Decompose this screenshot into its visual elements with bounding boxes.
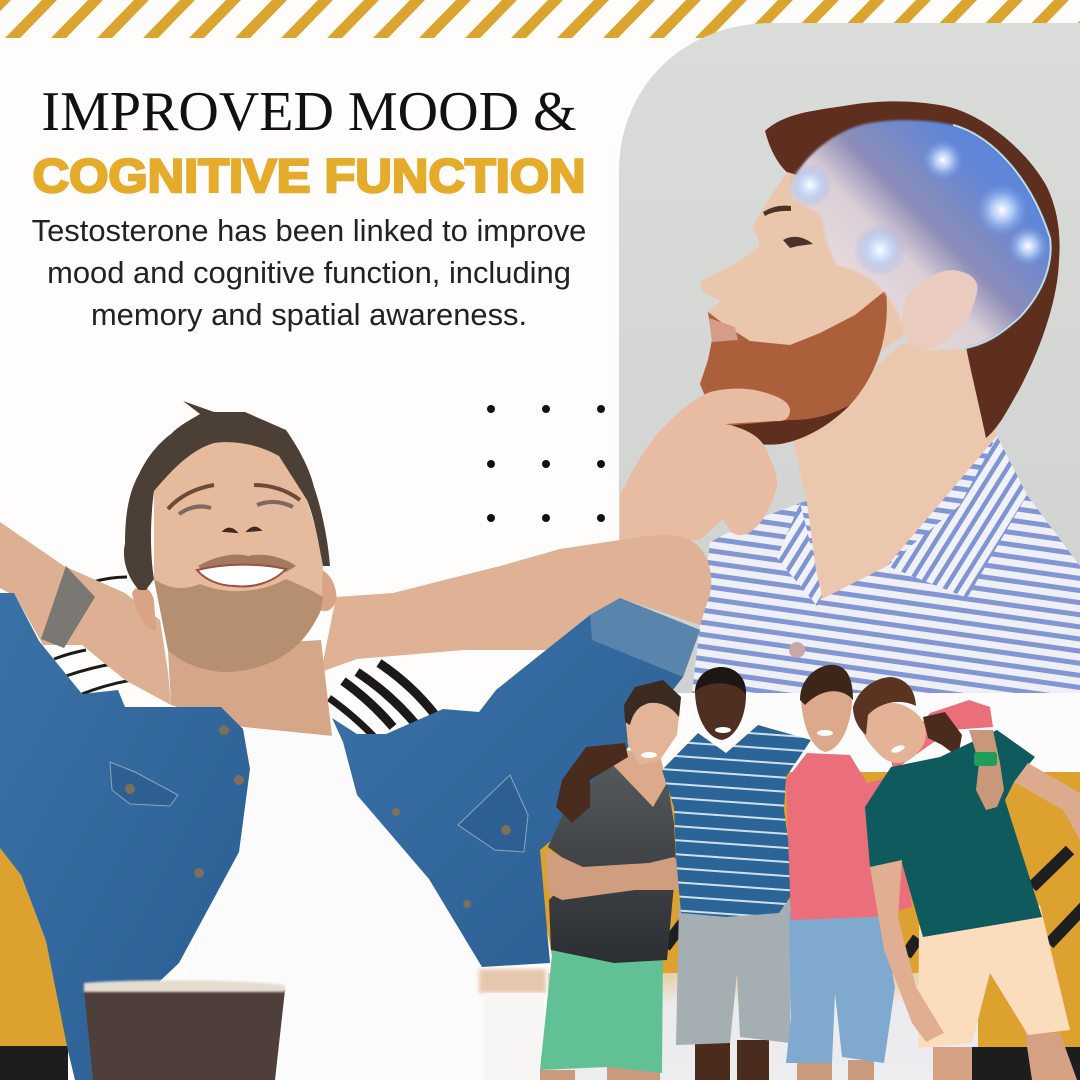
denim shirt left <box>0 593 250 1080</box>
concentric black arcs <box>54 577 436 742</box>
beard shadow <box>725 405 850 445</box>
body text <box>32 213 586 332</box>
group of four friends <box>540 665 1080 1080</box>
pale tabletop <box>484 993 544 1080</box>
arm over shoulder <box>969 730 1004 810</box>
eyes <box>179 502 293 514</box>
wristwatch <box>41 566 95 648</box>
smile <box>197 565 286 586</box>
face <box>154 441 323 672</box>
hair <box>124 401 330 590</box>
body text: mood and cognitive function, including <box>47 255 571 290</box>
friend 4: teal tee <box>853 677 1080 1080</box>
left chest pocket <box>110 762 178 806</box>
glowing spark 3 <box>1008 226 1048 266</box>
cup rim <box>84 980 285 992</box>
far arm <box>1014 763 1080 840</box>
friend 2: blue stripe polo <box>556 667 811 1080</box>
dark hand on shoulder <box>923 712 962 757</box>
neck <box>793 340 997 600</box>
raised arm <box>321 535 711 672</box>
panel: thinking man photo <box>619 23 1080 693</box>
hair <box>800 665 853 705</box>
smile <box>817 730 833 736</box>
beard <box>700 290 887 445</box>
body text: memory and spatial awareness. <box>91 297 527 332</box>
gold block left <box>0 848 68 1046</box>
near arm <box>870 860 944 1042</box>
shirt button <box>789 642 805 658</box>
title line 2: COGNITIVE FUNCTION <box>33 149 586 202</box>
neck <box>168 640 332 736</box>
coffee cup <box>84 980 285 1080</box>
smile <box>890 744 906 754</box>
stubble <box>154 579 323 672</box>
left collar <box>777 503 822 606</box>
face <box>700 172 920 444</box>
ear <box>902 270 978 349</box>
tee <box>548 763 676 963</box>
friend 3: pink henley <box>786 665 993 1080</box>
sleeve cuff highlight <box>590 598 700 677</box>
glowing rim <box>953 125 1051 349</box>
eyebrow strokes <box>168 485 300 509</box>
glowing spark 4 <box>854 224 906 276</box>
forearm and hand behind head <box>0 522 171 705</box>
glowing spark 1 <box>923 140 963 180</box>
legs <box>695 1040 769 1080</box>
denim shirt right <box>332 598 700 967</box>
table edge blur <box>479 969 546 993</box>
pink shirt <box>786 700 993 920</box>
legs <box>933 1033 1077 1080</box>
green watch <box>974 752 997 766</box>
arm around friend <box>556 743 628 823</box>
green shorts <box>540 945 663 1073</box>
smile <box>715 727 731 733</box>
hair <box>624 680 681 725</box>
peach shorts <box>918 905 1070 1048</box>
nostrils <box>224 528 260 532</box>
hair <box>853 677 916 735</box>
glowing spark 2 <box>976 184 1028 236</box>
right chest pocket <box>458 775 528 852</box>
arm <box>546 850 691 900</box>
legs <box>540 1067 660 1080</box>
right collar <box>887 436 1027 598</box>
hair <box>765 101 1060 438</box>
top striped band <box>0 0 1080 38</box>
blue shorts <box>786 908 895 1063</box>
striped polo <box>662 725 811 917</box>
white t-shirt <box>170 727 486 1080</box>
grey shorts <box>676 900 792 1045</box>
body text: Testosterone has been linked to improve <box>32 213 586 248</box>
striped shirt <box>692 436 1080 693</box>
white gap under panel <box>690 693 1080 772</box>
pale floor behind friends <box>548 973 978 1080</box>
hair <box>695 667 746 695</box>
friend 1: grey tee <box>540 680 691 1080</box>
ears <box>132 570 336 630</box>
glowing spark 5 <box>788 163 832 207</box>
head <box>860 703 926 763</box>
smiling man <box>0 401 711 1080</box>
thinking hand <box>620 389 790 540</box>
head <box>625 697 681 765</box>
dark bottom bars <box>0 1046 1080 1080</box>
head <box>695 667 746 740</box>
moustache <box>198 554 296 573</box>
teal tee <box>865 730 1042 937</box>
black diagonal accent stripes <box>665 850 1080 955</box>
legs <box>797 1060 874 1080</box>
smile <box>641 752 657 758</box>
head <box>801 678 852 752</box>
gold block right <box>533 772 1080 1047</box>
eye and brow <box>763 206 813 248</box>
brain overlay <box>788 120 1051 350</box>
title line 1: IMPROVED MOOD & <box>41 81 577 143</box>
buttons <box>125 725 511 908</box>
chest skin <box>611 750 667 807</box>
dot grid <box>487 405 605 522</box>
lips <box>709 318 738 342</box>
